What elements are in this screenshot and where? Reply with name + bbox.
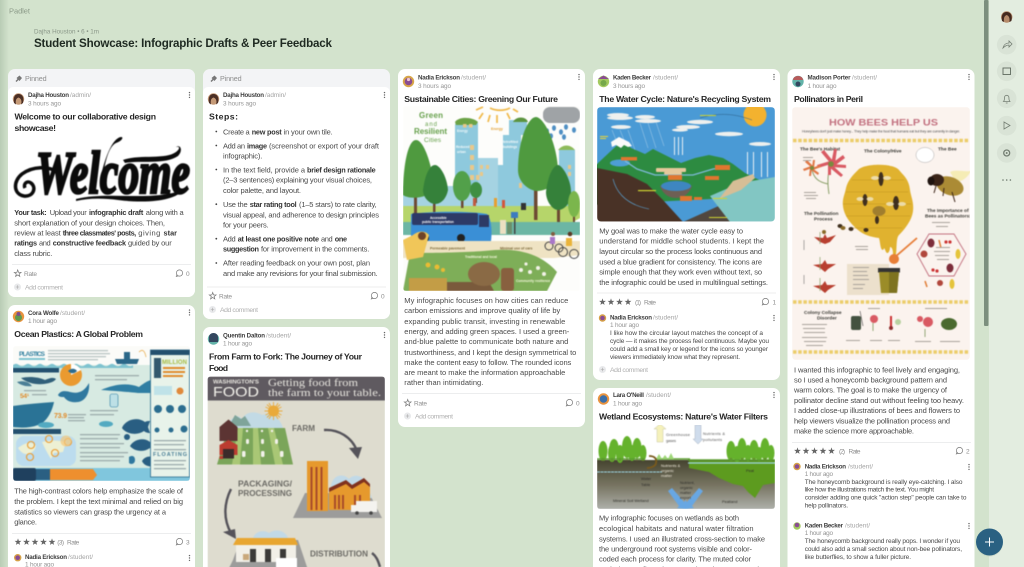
infographic image: wetland cross-section: Mineral Soil Wetland bbox=[613, 498, 649, 503]
panel: sustainable cities post: /student/ bbox=[461, 74, 486, 82]
panel: welcome post: /admin/ bbox=[70, 92, 91, 99]
post description: the infographic could be used in multilingual settings. bbox=[599, 278, 768, 287]
bee panel labels: The Importance of bbox=[927, 208, 969, 214]
importance hexagon bbox=[917, 234, 966, 289]
flowers bbox=[803, 149, 846, 194]
city heading: and bbox=[425, 122, 437, 128]
infographic image: wetland cross-section: organic bbox=[680, 485, 693, 490]
post description: the problem. I kept the text minimal and relied on big bbox=[14, 497, 183, 506]
panel: steps post bbox=[203, 69, 390, 319]
rating and comment count bbox=[404, 399, 580, 408]
infographic image: green and resilient cities: Reduced bbox=[456, 145, 470, 149]
post title: From Farm to Fork: The Journey of Your bbox=[209, 352, 363, 362]
panel: steps post: /admin/ bbox=[265, 92, 286, 99]
star rating: 4.5 of 5 bbox=[15, 538, 190, 546]
farm scene bbox=[217, 402, 293, 464]
bottom icons bbox=[851, 311, 957, 337]
nutrients and pollutants arrow bbox=[693, 425, 725, 444]
post description bbox=[599, 226, 768, 287]
infographic image: plastics in the ocean: PLASTICS bbox=[19, 351, 46, 358]
bee panel labels: The Colony/Hive bbox=[864, 148, 902, 154]
right column of the ocean graphic: MILLION bbox=[162, 360, 187, 366]
post description: The high-contrast colors help emphasize the scale of bbox=[14, 487, 184, 496]
add comment bbox=[404, 412, 453, 420]
steps bulleted list: in your own tile. bbox=[284, 127, 333, 136]
infographic image: green and resilient cities: Energy bbox=[457, 129, 468, 133]
steps bulleted list: After reading feedback on your own post, plan bbox=[223, 259, 370, 268]
sun bbox=[476, 107, 518, 123]
panel: steps post: 3 hours ago bbox=[223, 100, 256, 108]
toolbar: settings bbox=[997, 143, 1016, 163]
task text: Upload your bbox=[50, 208, 87, 217]
post description: layout circular so the process looks continuous and bbox=[599, 247, 762, 256]
rating and comment count bbox=[14, 270, 190, 278]
post description: carbon emissions and improve quality of life by bbox=[404, 306, 561, 315]
post title: Sustainable Cities: Greening Our Future bbox=[404, 94, 558, 104]
panel: farm to fork post: 1 hour ago bbox=[223, 340, 252, 348]
steps bulleted list: In the text field, provide a bbox=[223, 165, 306, 174]
steps bulleted list: (screenshot or export of your draft bbox=[269, 141, 380, 150]
right column of the ocean graphic bbox=[150, 350, 190, 477]
city heading: Resilient bbox=[414, 127, 447, 136]
infographic image: food from farm to table: FOOD bbox=[213, 384, 259, 400]
comment: Nadia Erickson: Nadia Erickson bbox=[610, 314, 652, 322]
infographic image: wetland cross-section: export bbox=[680, 495, 692, 500]
small caption bars bbox=[802, 157, 960, 346]
comment: Kaden Becker: The honeycomb background really pops. I wonder if you bbox=[805, 538, 960, 545]
gardener and garden: Community resilience bbox=[516, 279, 550, 283]
post description: and-blue palette to communicate both nature and bbox=[404, 337, 568, 346]
infographic image: food from farm to table bbox=[208, 376, 385, 567]
packaging label and arrow bbox=[223, 480, 293, 539]
star rating: 4 of 5: 1 bbox=[772, 300, 776, 306]
panel: ocean plastics post: Cora Wolfe bbox=[28, 310, 60, 317]
panel: ocean plastics post: 1 hour ago bbox=[28, 318, 57, 325]
post description: understand for middle school students. I kept the bbox=[599, 237, 764, 246]
post heading: showcase! bbox=[14, 123, 56, 133]
hive bbox=[838, 165, 913, 256]
comment: Nadia Erickson: consider adding one quick "action step" people can take to bbox=[805, 494, 967, 502]
infographic image: green and resilient cities: Permeable pavement bbox=[430, 246, 466, 250]
floating add button bbox=[976, 528, 1003, 556]
rating and comment count: Rate bbox=[219, 294, 232, 300]
task text: guided by our bbox=[128, 239, 172, 248]
city heading bbox=[414, 111, 447, 144]
panel: welcome post: 3 hours ago bbox=[28, 100, 61, 108]
infographic image: food from farm to table: the farm to your table. bbox=[268, 387, 381, 399]
steps bulleted list: visual appeal, and adherence to design principles bbox=[223, 210, 379, 219]
steps bulleted list bbox=[215, 127, 380, 278]
comment: Nadia Erickson: I like how the circular layout matches the concept of a bbox=[610, 330, 763, 337]
rating and comment count: 0 bbox=[186, 271, 190, 278]
post description bbox=[793, 365, 964, 436]
infographic image: green and resilient cities: Energy bbox=[491, 127, 503, 131]
right toolbar bbox=[989, 0, 1024, 567]
bus bbox=[411, 212, 492, 242]
post title: Ocean Plastics: A Global Problem bbox=[14, 329, 143, 339]
post heading bbox=[14, 112, 156, 133]
panel: water cycle post: /student/ bbox=[653, 74, 678, 82]
pollination flowers bbox=[804, 226, 846, 293]
honey dipper and jar bbox=[847, 238, 917, 295]
bee panel labels: Colony Collapse bbox=[804, 310, 842, 316]
avatar: Cora Wolfe bbox=[13, 311, 24, 322]
panel: pollinators post bbox=[788, 69, 974, 567]
infographic image: wetland cross-section: Nutrient, bbox=[680, 480, 695, 485]
infographic image: plastics in the ocean bbox=[13, 346, 190, 481]
panel: wetland ecosystems post: /student/ bbox=[646, 392, 671, 399]
infographic image: green and resilient cities: urban bbox=[457, 150, 466, 154]
infographic image: water cycle diagram bbox=[597, 107, 775, 222]
panel: sustainable cities post bbox=[398, 69, 585, 427]
panel: water cycle post: 3 hours ago bbox=[613, 83, 645, 90]
star rating: 4.5 of 5: 3 bbox=[186, 540, 190, 546]
star rating: 4.5 of 5: Rate bbox=[67, 540, 80, 546]
packaging label and arrow: PROCESSING bbox=[238, 489, 292, 498]
steps bulleted list: new post bbox=[252, 127, 282, 136]
export arrows bbox=[668, 488, 703, 509]
steps bulleted list: infographic). bbox=[223, 151, 262, 160]
welcome script image bbox=[15, 137, 190, 206]
steps heading: Steps: bbox=[209, 112, 238, 122]
star rating: 4 of 5 bbox=[599, 298, 776, 306]
infographic image: wetland cross-section: Water bbox=[641, 476, 652, 481]
avatar: Kaden Becker bbox=[598, 76, 609, 87]
comment: Kaden Becker: could also add a small section about non-bee pollinators, bbox=[805, 546, 962, 553]
infographic image: wetland cross-section bbox=[597, 424, 775, 509]
infographic image: wetland cross-section: matter bbox=[661, 473, 673, 478]
post description: pollinator decline stand out without feeling too heavy. bbox=[794, 396, 964, 405]
pinned label: Pinned bbox=[220, 74, 242, 83]
post description: I added close-up illustrations of bees and flowers to bbox=[794, 406, 960, 415]
steps bulleted list: at least one positive note bbox=[238, 235, 319, 244]
panel: wetland ecosystems post: Lara O'Neill bbox=[613, 392, 644, 399]
post description: statistics so viewers can grasp the urgency at a bbox=[14, 507, 167, 516]
toolbar: play bbox=[997, 116, 1016, 136]
post description: the underground root systems visible and color- bbox=[599, 544, 752, 553]
toolbar: more bbox=[1002, 179, 1011, 181]
comment: Nadia Erickson: /student/ bbox=[848, 463, 873, 470]
comment: Kaden Becker bbox=[793, 522, 970, 561]
rain cloud bbox=[543, 107, 580, 140]
steps bulleted list: for improvement in the comments. bbox=[261, 245, 369, 254]
panel: wetland ecosystems post bbox=[593, 388, 780, 567]
bee panel labels: The Pollination bbox=[804, 211, 838, 217]
post description: used a blue gradient for consistency. The icons are bbox=[599, 257, 762, 266]
post description: trustworthiness, and I kept the design symmetrical to bbox=[404, 348, 576, 357]
nutrients and pollutants arrow: Nutrients & bbox=[703, 431, 725, 436]
post title: The Water Cycle: Nature's Recycling System bbox=[599, 94, 771, 104]
comment: Kaden Becker: like butterflies, to show a fuller picture. bbox=[805, 554, 911, 561]
infographic image: green and resilient cities: Minimal use of cars bbox=[500, 246, 533, 250]
post description: make the science more approachable. bbox=[794, 427, 914, 436]
avatar: Madison Porter bbox=[792, 76, 804, 87]
steps bulleted list: Add bbox=[223, 235, 236, 244]
packaging label and arrow: PACKAGING/ bbox=[238, 480, 293, 488]
rating and comment count: Rate bbox=[24, 271, 37, 278]
infographic image: green and resilient cities bbox=[403, 106, 580, 291]
task text: three classmates' posts, bbox=[63, 228, 136, 238]
star rating: 4 of 5: (1) bbox=[635, 300, 641, 306]
infographic image: wetland cross-section: Peatland bbox=[722, 499, 737, 504]
comment: Nadia Erickson: /student/ bbox=[68, 554, 93, 561]
factory scene bbox=[293, 461, 382, 518]
comment: Nadia Erickson: Nadia Erickson bbox=[805, 463, 846, 470]
pinned label bbox=[16, 74, 47, 83]
post title: Wetland Ecosystems: Nature's Water Filters bbox=[599, 411, 768, 421]
comment: Nadia Erickson: 1 hour ago bbox=[805, 471, 833, 478]
panel: pollinators post: /student/ bbox=[852, 74, 877, 82]
avatar: Dajha Houston bbox=[208, 93, 219, 105]
panel: pollinators post: Madison Porter bbox=[808, 74, 851, 82]
post description: My infographic focuses on how cities can reduce bbox=[404, 296, 568, 305]
bee panel labels: Disorder bbox=[817, 316, 837, 322]
task text: ratings bbox=[14, 239, 37, 248]
panel: farm to fork post: /student/ bbox=[266, 332, 291, 339]
steps bulleted list: one bbox=[335, 235, 347, 244]
toolbar: bell bbox=[997, 88, 1016, 108]
large bee bbox=[916, 148, 971, 202]
toolbar: share bbox=[997, 35, 1016, 54]
steps bulleted list: (1–5 stars) to rate clarity, bbox=[299, 200, 377, 209]
add comment bbox=[599, 366, 648, 374]
infographic image: how bees help us: Honeybees don't just make honey... They help make the food that humans eat but they are currently in danger. bbox=[802, 130, 960, 134]
toolbar: crop bbox=[997, 62, 1016, 81]
comment: Nadia Erickson: help pollinators. bbox=[805, 502, 848, 510]
avatar: Lara O'Neill bbox=[598, 393, 609, 405]
task text: short explanation of your design choices. Then, bbox=[14, 218, 165, 227]
steps bulleted list: Add an bbox=[223, 141, 245, 150]
post description: systems. I used an illustrated cross-section to make bbox=[599, 534, 765, 543]
post description: make the content easy to follow. The rounded icons bbox=[404, 358, 572, 367]
distribution label and arrow: DISTRIBUTION bbox=[310, 550, 368, 558]
bicycles and pedestrians bbox=[473, 198, 578, 258]
pinned label bbox=[210, 74, 242, 83]
task text bbox=[14, 208, 185, 258]
board header bbox=[34, 28, 333, 50]
pinned label: Pinned bbox=[25, 74, 47, 83]
infographic image: green and resilient cities: buildings bbox=[503, 145, 517, 149]
comment: Nadia Erickson bbox=[14, 554, 190, 567]
comment: Kaden Becker: /student/ bbox=[845, 523, 870, 530]
task text: star bbox=[164, 228, 177, 238]
comment: Nadia Erickson: The honeycomb background is really eye-catching. I also bbox=[805, 479, 963, 486]
post description: coded each process for clarity. The muted color bbox=[599, 555, 752, 564]
post description: ecological habitats and natural water filtration bbox=[599, 524, 754, 533]
add comment: Add comment bbox=[220, 307, 258, 314]
honeycomb bead bands bbox=[793, 140, 969, 352]
post description: energy, and adding green spaces. I used a green- bbox=[404, 327, 570, 336]
post title bbox=[209, 352, 363, 373]
comment: Kaden Becker: 1 hour ago bbox=[805, 530, 833, 537]
infographic image: plastics in the ocean: 73.9 bbox=[54, 413, 67, 420]
panel: steps post: Dajha Houston bbox=[223, 92, 264, 99]
greenhouse gases arrow bbox=[654, 424, 691, 443]
add comment: Add comment bbox=[25, 284, 63, 292]
panel: welcome post bbox=[8, 69, 195, 297]
panel: wetland ecosystems post: 1 hour ago bbox=[613, 400, 642, 408]
steps bulleted list: and bbox=[321, 235, 333, 244]
steps bulleted list: suggestion bbox=[223, 245, 259, 254]
comment: Nadia Erickson bbox=[793, 463, 970, 510]
infographic image: plastics in the ocean: 54¹ bbox=[20, 393, 29, 400]
avatar: Dajha Houston bbox=[13, 93, 24, 105]
panel: pollinators post: 1 hour ago bbox=[808, 83, 837, 90]
infographic image: wetland cross-section: Table bbox=[641, 482, 650, 487]
task text: infographic draft bbox=[89, 208, 144, 217]
star rating: 4 of 5: Rate bbox=[644, 300, 656, 306]
rating and comment count: Rate bbox=[414, 400, 427, 408]
add comment: Add comment bbox=[610, 367, 648, 374]
star rating: 4.5 of 5: (3) bbox=[57, 540, 64, 546]
infographic image: wetland cross-section: organic bbox=[661, 468, 674, 473]
board title: Student Showcase: Infographic Drafts & Peer Feedback bbox=[34, 37, 333, 50]
panel: farm to fork post bbox=[203, 327, 390, 567]
post title: Food bbox=[209, 363, 228, 373]
post description: glance. bbox=[14, 517, 37, 526]
post description: are meant to make the information approachable bbox=[404, 368, 565, 377]
star rating: 5 of 5: Rate bbox=[848, 448, 861, 456]
star rating: 5 of 5: 2 bbox=[966, 448, 970, 456]
board byline: Dajha Houston • 6 • 1m bbox=[34, 28, 99, 35]
panel: ocean plastics post bbox=[8, 305, 195, 567]
infographic image: wetland cross-section: matter bbox=[680, 490, 692, 495]
comment: Nadia Erickson: cycle — it makes the process feel continuous. Maybe you bbox=[610, 338, 769, 345]
post description: help viewers visualize the pollination process and bbox=[794, 416, 950, 425]
star rating: 5 of 5: (2) bbox=[839, 448, 845, 456]
app logo: Padlet: Padlet bbox=[9, 6, 31, 16]
right column of the ocean graphic: FLOATING bbox=[153, 452, 187, 458]
farm label and arrow: FARM bbox=[292, 424, 315, 433]
steps bulleted list: Create a bbox=[223, 127, 251, 136]
infographic image: wetland cross-section: Peat bbox=[746, 468, 755, 473]
post description: rather than intimidating. bbox=[404, 378, 483, 387]
infographic image: food from farm to table: WASHINGTON'S bbox=[213, 380, 260, 386]
task text: review at least bbox=[14, 228, 62, 238]
warehouse scene bbox=[228, 531, 308, 567]
steps bulleted list: color palette, and layout. bbox=[223, 186, 301, 195]
add comment bbox=[209, 306, 258, 314]
rating and comment count: 0 bbox=[576, 400, 580, 408]
comment: Nadia Erickson: could add a small key or legend for the icons so younger bbox=[610, 346, 769, 353]
rating and comment count: 0 bbox=[381, 294, 385, 300]
comment: Nadia Erickson: /student/ bbox=[653, 314, 678, 322]
bee chart title: HOW BEES HELP US bbox=[829, 118, 938, 128]
bee panel labels: The Bee bbox=[938, 146, 957, 152]
comment: Nadia Erickson: 1 hour ago bbox=[610, 322, 639, 329]
steps bulleted list: star rating tool bbox=[250, 200, 297, 209]
farm label and arrow bbox=[292, 424, 362, 459]
post description: I wanted this infographic to feel lively and engaging, bbox=[794, 365, 960, 374]
comment: Nadia Erickson: viewers immediately know what they represent. bbox=[610, 354, 740, 361]
panel: water cycle post bbox=[593, 69, 780, 380]
infographic image: green and resilient cities: Retrofitted bbox=[502, 140, 518, 144]
infographic image: food from farm to table: Getting food from bbox=[268, 377, 358, 389]
panel: farm to fork post: Quentin Dalton bbox=[223, 332, 265, 339]
avatar: Nadia Erickson bbox=[403, 76, 414, 87]
task text: constructive feedback bbox=[53, 239, 127, 248]
post title: Pollinators in Peril bbox=[794, 94, 863, 104]
steps bulleted list: image bbox=[247, 141, 267, 150]
add comment: Add comment bbox=[415, 414, 453, 420]
gardener and garden bbox=[403, 232, 557, 291]
bus: Accessible bbox=[430, 216, 447, 220]
comment: Nadia Erickson: like how the illustrations match the text. You might bbox=[805, 486, 934, 494]
post description: warm colors. The goal is to make the urgency of bbox=[793, 386, 948, 395]
post description bbox=[14, 487, 184, 526]
infographic image: how bees help us bbox=[792, 107, 971, 360]
bee panel labels: The Bee's Habitat bbox=[800, 146, 840, 152]
comment: Kaden Becker: Kaden Becker bbox=[805, 523, 844, 530]
post description: My goal was to make the water cycle easy to bbox=[599, 226, 743, 236]
task text: class rubric. bbox=[14, 249, 52, 258]
panel: sustainable cities post: Nadia Erickson bbox=[418, 74, 460, 82]
bus: public transportation bbox=[422, 220, 454, 224]
gardener and garden: Traditional and local bbox=[465, 255, 497, 259]
task text: along with a bbox=[146, 208, 185, 217]
steps bulleted list: (2–3 sentences) explaining your visual choices, bbox=[223, 176, 372, 185]
panel: welcome post: Dajha Houston bbox=[28, 92, 69, 99]
welcome script image: Welcome bbox=[36, 140, 190, 206]
post description bbox=[599, 514, 765, 567]
greenhouse gases arrow: gases bbox=[666, 438, 676, 443]
add comment bbox=[14, 284, 63, 292]
panel: water cycle post: Kaden Becker bbox=[613, 74, 652, 82]
infographic image: wetland cross-section: Nutrients & bbox=[661, 463, 681, 468]
bee panel labels bbox=[800, 146, 971, 322]
greenhouse gases arrow: Greenhouse bbox=[666, 432, 691, 437]
toolbar avatar bbox=[1001, 11, 1012, 23]
post description: simple enough that they work even without text, so bbox=[599, 268, 762, 277]
city heading: Green bbox=[419, 111, 443, 120]
avatar: Quentin Dalton bbox=[208, 333, 219, 345]
distribution label and arrow bbox=[310, 550, 380, 567]
panel: ocean plastics post: /student/ bbox=[60, 310, 85, 317]
steps bulleted list: brief design rationale bbox=[307, 165, 376, 174]
post description: so I used a honeycomb background pattern and bbox=[794, 375, 947, 384]
steps bulleted list: for your peers. bbox=[223, 220, 269, 229]
post description: expanding public transit, investing in renewable bbox=[404, 317, 565, 326]
task text: giving bbox=[138, 228, 160, 238]
post description bbox=[404, 296, 576, 387]
post description: My infographic focuses on wetlands as both bbox=[599, 514, 739, 523]
post heading: Welcome to our collaborative design bbox=[14, 112, 156, 122]
trees bbox=[403, 117, 580, 227]
nutrients and pollutants arrow: pollutants bbox=[703, 437, 722, 442]
task text: Your task: bbox=[14, 208, 47, 217]
star rating: 5 of 5 bbox=[794, 447, 970, 456]
task text: and bbox=[39, 239, 51, 248]
rating and comment count bbox=[209, 292, 385, 300]
scrollbar bbox=[984, 0, 988, 326]
comment: Nadia Erickson bbox=[599, 314, 775, 361]
steps bulleted list: and make any revisions for your final submission. bbox=[223, 269, 378, 278]
bee panel labels: Process bbox=[814, 216, 833, 222]
steps bulleted list: Use the bbox=[223, 200, 248, 209]
city heading: Cities bbox=[424, 137, 442, 144]
comment: Nadia Erickson: Nadia Erickson bbox=[25, 554, 67, 561]
panel: sustainable cities post: 3 hours ago bbox=[418, 83, 451, 90]
bee panel labels: Bees as Pollinators: bbox=[925, 214, 971, 220]
